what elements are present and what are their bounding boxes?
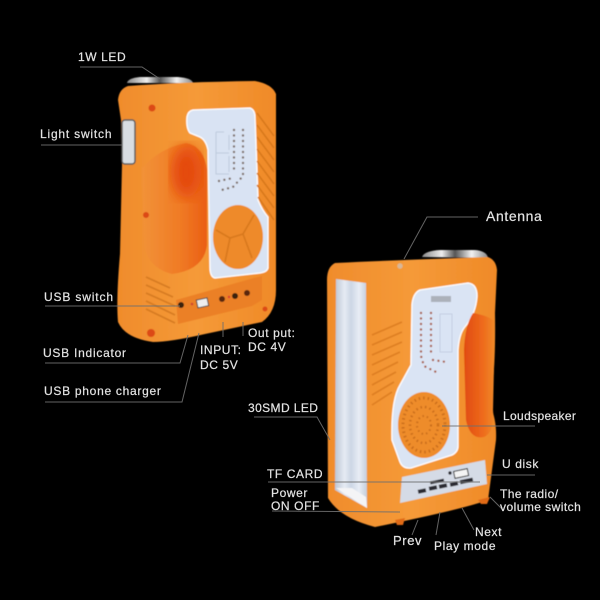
LED panel (335, 279, 367, 508)
molded digit outline (216, 132, 229, 174)
label: Output DC 4V: Out put: (248, 326, 296, 340)
antenna knob (397, 263, 403, 269)
feet (395, 497, 490, 525)
label: Power ON OFF: ON OFF (271, 499, 320, 513)
label: USB phone charger: USB phone charger (44, 384, 162, 398)
U disk port (454, 469, 469, 478)
leader lines (41, 67, 535, 535)
speaker grille (398, 392, 450, 458)
icon: light switch (122, 120, 135, 164)
body: orange casing (117, 81, 276, 342)
dial: orange wheel (213, 205, 263, 269)
LED bottom reflectors (336, 488, 367, 508)
recess highlight (171, 146, 201, 198)
device: right unit front view (327, 250, 497, 527)
TF slot and buttons (418, 471, 473, 494)
label: Next: Next (475, 525, 502, 539)
dot grid (421, 313, 446, 372)
white control panel (187, 108, 268, 278)
speaker vents (146, 277, 175, 323)
port recess (176, 276, 262, 324)
label: Loudspeaker: Loudspeaker (503, 409, 576, 423)
handle recess (464, 313, 495, 437)
dot grid (218, 130, 243, 191)
label: 30SMD LED: 30SMD LED (248, 401, 318, 415)
control plate (400, 460, 487, 503)
icon: 1W LED lamp (127, 77, 193, 83)
label: radio volume switch: volume switch (500, 500, 581, 514)
labels (40, 50, 581, 553)
molded digit outline (440, 314, 452, 352)
label: INPUT DC 5V: DC 5V (200, 358, 238, 372)
dial cross ridges (216, 215, 254, 262)
label: TF CARD: TF CARD (267, 467, 323, 481)
label: Power ON OFF: Power (271, 486, 308, 500)
label: Antenna: Antenna (486, 208, 542, 224)
label: INPUT DC 5V: INPUT: (200, 343, 242, 357)
label: 1W LED: 1W LED (78, 50, 126, 64)
label: radio volume switch: The radio/ (500, 487, 559, 501)
label: USB Indicator: USB Indicator (43, 346, 127, 360)
ribbed grip (372, 322, 402, 405)
label: U disk: U disk (502, 457, 539, 471)
label: Light switch: Light switch (40, 127, 112, 141)
USB port (196, 298, 209, 308)
ribbed grip (257, 113, 274, 220)
body: orange casing (327, 257, 497, 527)
icon: lamp top (422, 250, 488, 258)
white control panel (392, 283, 477, 468)
handle recess (142, 143, 207, 274)
label: Play mode: Play mode (434, 539, 496, 553)
brand text mark (431, 296, 451, 302)
device: left unit rear view (117, 77, 276, 342)
label: Output DC 4V: DC 4V (248, 340, 286, 354)
ports (178, 302, 184, 308)
label: Prev: Prev (393, 533, 422, 548)
screw holes (148, 104, 156, 112)
label: USB switch: USB switch (44, 290, 114, 304)
